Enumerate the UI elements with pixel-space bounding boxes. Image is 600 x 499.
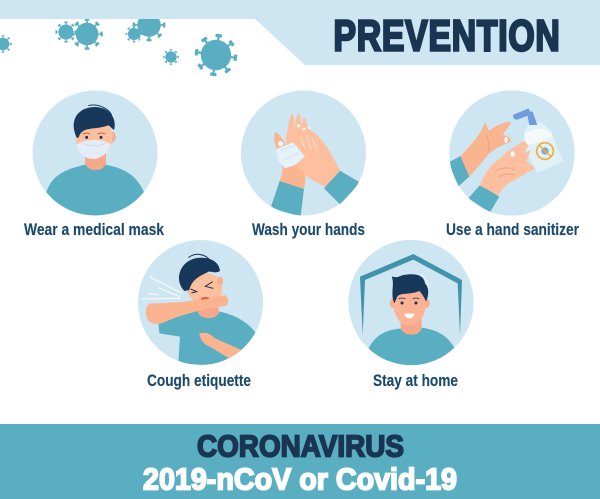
illustration: man with mask [32,90,157,218]
footer subheading: 2019-nCoV or Covid-19 [143,462,457,496]
illustration: man at home [348,240,474,368]
footer heading: CORONAVIRUS [197,428,404,464]
virus particles [0,10,238,77]
panel: use a hand sanitizer [446,90,579,239]
illustration: coughing into elbow [138,240,263,367]
illustration: sanitizer and hands [449,90,575,216]
footer band [0,424,600,499]
illustration: washing hands [241,90,366,217]
label: Cough etiquette [147,371,251,390]
label: Wear a medical mask [24,220,164,239]
label: Wash your hands [252,220,365,239]
panel: stay at home [348,240,474,390]
panel: wear a medical mask [24,90,164,239]
header band [0,0,600,65]
panel: cough etiquette [138,240,263,390]
label: Stay at home [373,371,458,390]
panel: wash your hands [241,90,366,239]
